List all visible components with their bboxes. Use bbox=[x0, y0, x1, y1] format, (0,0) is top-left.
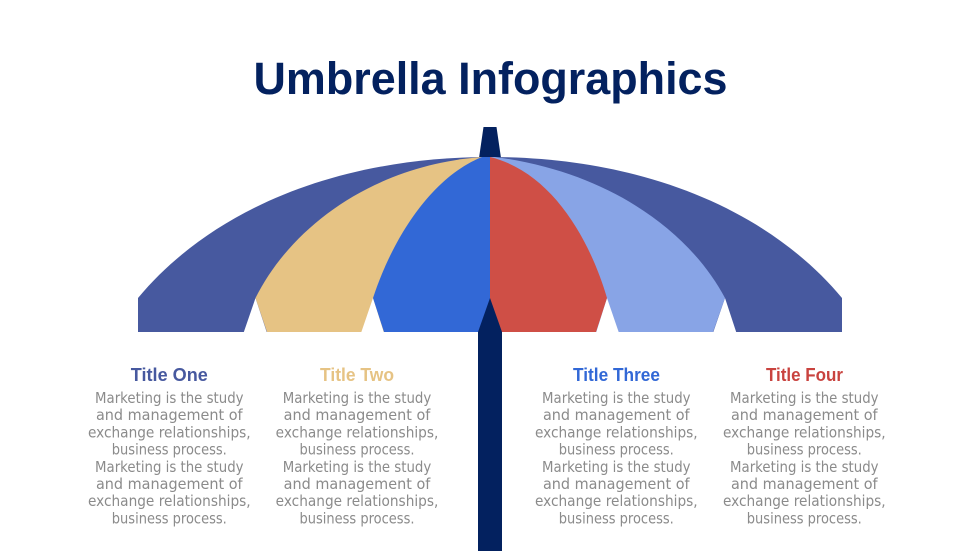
body: title four: exchange relationships, bbox=[723, 492, 886, 510]
body: title one: and management of bbox=[96, 475, 243, 493]
body: title three bbox=[535, 389, 698, 527]
title: Umbrella Infographics bbox=[254, 53, 728, 104]
body: title one: Marketing is the study bbox=[95, 458, 244, 476]
heading: title three: Title Three bbox=[573, 365, 660, 385]
body: title two bbox=[276, 389, 438, 527]
body: title two: exchange relationships, bbox=[276, 423, 438, 441]
heading: title one: Title One bbox=[131, 365, 208, 385]
body: title three: and management of bbox=[543, 406, 690, 424]
text block: title one bbox=[88, 365, 251, 527]
text block: title two bbox=[276, 365, 438, 527]
body: title four: and management of bbox=[731, 406, 878, 424]
body: title three: Marketing is the study bbox=[542, 389, 691, 407]
body: title three: Marketing is the study bbox=[542, 458, 691, 476]
body: title one: business process. bbox=[112, 509, 227, 527]
white gap: right inner bbox=[596, 298, 619, 333]
panel: canopy left outer segment bbox=[138, 157, 490, 332]
umbrella bbox=[138, 127, 842, 551]
icon: umbrella top tip bbox=[479, 127, 501, 158]
body: title two: Marketing is the study bbox=[283, 389, 431, 407]
body: title four: Marketing is the study bbox=[730, 389, 879, 407]
text block: title three bbox=[535, 365, 698, 527]
body: title one: and management of bbox=[96, 406, 243, 424]
body: title one bbox=[88, 389, 251, 527]
body: title two: business process. bbox=[300, 509, 414, 527]
body: title one: exchange relationships, bbox=[88, 423, 251, 441]
white gap: right outer bbox=[713, 298, 736, 333]
body: title two: business process. bbox=[300, 441, 414, 459]
body: title one: exchange relationships, bbox=[88, 492, 251, 510]
body: title two: and management of bbox=[284, 475, 431, 493]
panel: canopy tan segment bbox=[256, 157, 490, 332]
body: title two: and management of bbox=[284, 406, 431, 424]
panel: canopy right outer segment bbox=[490, 157, 842, 332]
white gap: left inner bbox=[361, 298, 384, 333]
heading: title four: Title Four bbox=[766, 365, 843, 385]
icon: umbrella pole bbox=[478, 298, 502, 551]
white gap: left outer bbox=[244, 298, 267, 333]
panel: canopy blue segment bbox=[373, 157, 490, 332]
body: title four: business process. bbox=[747, 441, 862, 459]
text block: title four bbox=[723, 365, 886, 527]
body: title four: and management of bbox=[731, 475, 878, 493]
panel: canopy red segment bbox=[490, 157, 607, 332]
body: title two: Marketing is the study bbox=[283, 458, 431, 476]
body: title three: exchange relationships, bbox=[535, 423, 698, 441]
body: title one: business process. bbox=[112, 441, 227, 459]
body: title three: business process. bbox=[559, 509, 674, 527]
body: title three: exchange relationships, bbox=[535, 492, 698, 510]
body: title two: exchange relationships, bbox=[276, 492, 438, 510]
body: title four bbox=[723, 389, 886, 527]
body: title four: business process. bbox=[747, 509, 862, 527]
body: title one: Marketing is the study bbox=[95, 389, 244, 407]
body: title four: exchange relationships, bbox=[723, 423, 886, 441]
body: title three: and management of bbox=[543, 475, 690, 493]
body: title three: business process. bbox=[559, 441, 674, 459]
body: title four: Marketing is the study bbox=[730, 458, 879, 476]
panel: canopy light blue segment bbox=[490, 157, 725, 332]
heading: title two: Title Two bbox=[320, 365, 394, 385]
